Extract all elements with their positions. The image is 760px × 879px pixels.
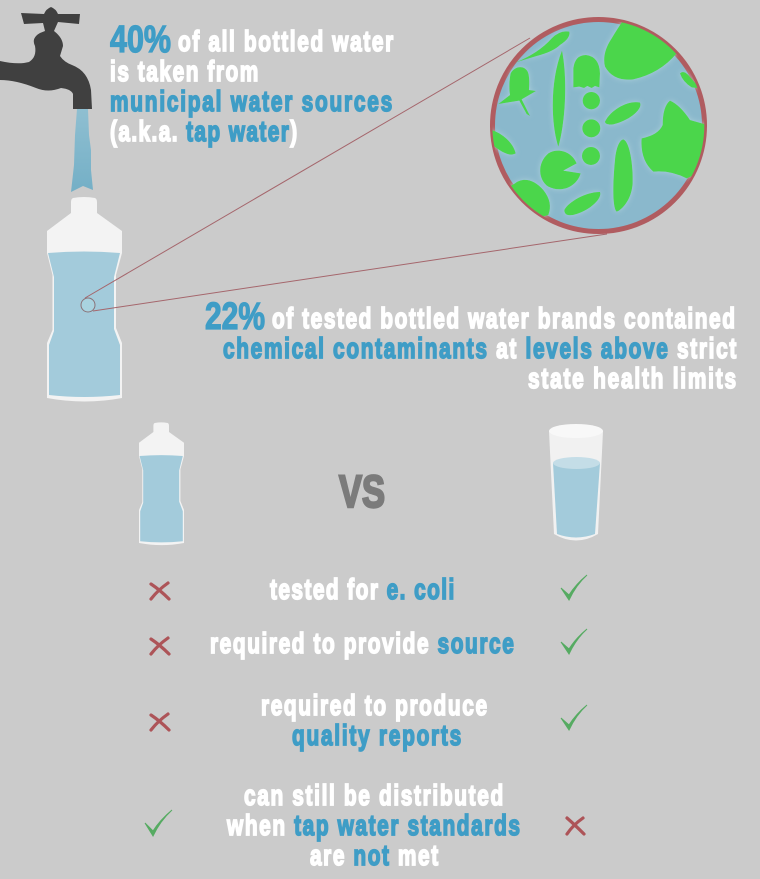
stat: 40% bottled water from municipal sources (110, 19, 393, 148)
row: required to provide source: required to provide source (210, 628, 514, 660)
check: tap (561, 629, 587, 654)
row: required to produce quality reports: quality reports (292, 720, 461, 752)
icon: faucet (0, 7, 92, 109)
stat: 40% bottled water from municipal sources: municipal water sources (110, 86, 392, 118)
stat: 22% brands contained contaminants: of tested bottled water brands contained (272, 303, 735, 335)
zoom connector lines (85, 38, 607, 311)
stat: 22% brands contained contaminants (205, 296, 737, 395)
cross: bottled (151, 714, 169, 730)
row: tested for e. coli: tested for e. coli (270, 574, 454, 606)
stat: 22% brands contained contaminants: 22% (205, 296, 265, 338)
check: tap (561, 705, 587, 730)
row: required to produce quality reports (151, 690, 587, 752)
stat: 22% brands contained contaminants: state health limits (528, 363, 736, 395)
row: required to produce quality reports: required to produce (261, 690, 487, 722)
stat: 22% brands contained contaminants: chemical contaminants at levels above strict (223, 333, 737, 365)
stat: 40% bottled water from municipal sources: (a.k.a. tap water) (110, 116, 297, 148)
check: tap (561, 575, 587, 600)
cross: tap (567, 818, 584, 834)
cross: bottled (151, 583, 169, 599)
stat: 40% bottled water from municipal sources: 40% (110, 19, 171, 61)
magnified water circle with contaminants (490, 20, 713, 232)
icon: large water bottle (47, 197, 122, 402)
row: required to provide source (151, 628, 587, 660)
row: tested for e. coli (151, 574, 587, 606)
row: can still be distributed (145, 780, 584, 872)
row: can still be distributed: can still be distributed (244, 780, 503, 812)
magnifier circle (81, 298, 95, 312)
stat: 40% bottled water from municipal sources: of all bottled water (178, 26, 393, 58)
check: bottled (145, 810, 172, 836)
row: can still be distributed: when tap water standards (226, 810, 520, 842)
row: can still be distributed: are not met (310, 840, 439, 872)
cross: bottled (151, 638, 169, 654)
icon: glass of water (549, 424, 603, 540)
icon: water stream (71, 109, 93, 192)
icon: small water bottle (139, 422, 184, 545)
vs label: VS (339, 466, 385, 517)
stat: 40% bottled water from municipal sources: is taken from (110, 56, 258, 88)
